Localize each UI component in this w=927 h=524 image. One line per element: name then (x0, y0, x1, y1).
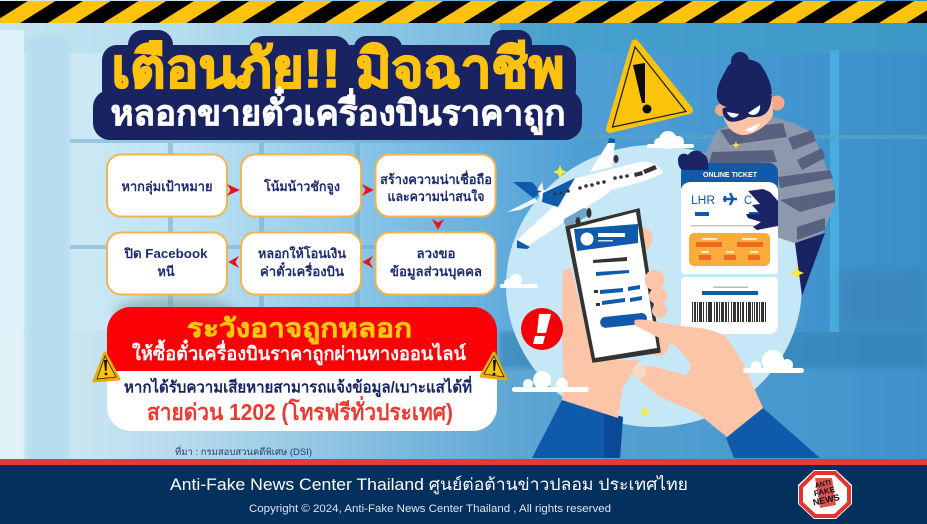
arrow 5 (229, 257, 238, 267)
arrow 4 (363, 257, 372, 267)
step 6 (107, 232, 227, 294)
warning heading: ระวังอาจถูกหลอก (187, 313, 412, 345)
logo: anti fake news: FAKE (813, 485, 836, 498)
step 1 (107, 154, 227, 216)
step 2 (241, 154, 361, 216)
thief gloves (678, 151, 778, 230)
palm right (633, 320, 763, 437)
hazard stripe band (0, 1, 927, 23)
icon: large warning triangle (610, 44, 689, 129)
ticket header (681, 163, 778, 190)
sparkles (553, 141, 804, 417)
ticket: ONLINE TICKET (703, 170, 757, 179)
warning subheading: ให้ซื้อตั๋วเครื่องบินราคาถูกผ่านทางออนไลน์ (132, 339, 466, 366)
arrow 2 (363, 185, 373, 195)
ticket (681, 163, 778, 334)
phone button (600, 313, 647, 328)
logo: anti fake news: NEWS (812, 492, 840, 508)
thief face (715, 90, 784, 135)
title line 1: เตือนภัย!! มิจฉาชีพ (112, 39, 564, 99)
thief striped sweater (705, 117, 835, 243)
backdrop circle (506, 145, 802, 427)
phone profile header (574, 224, 638, 251)
barcode (692, 302, 766, 322)
clouds (500, 131, 804, 392)
title navy backing (93, 30, 582, 140)
step 5: ค่าตั๋วเครื่องบิน (260, 261, 344, 279)
ticket stub (681, 277, 778, 334)
icon: small warning right (481, 353, 506, 379)
step 3 (376, 154, 496, 216)
route text: LHR (691, 195, 715, 207)
thief beanie (717, 52, 772, 107)
copyright: Copyright © 2024, Anti-Fake News Center Thailand , All rights reserved (249, 503, 611, 515)
sleeve right (726, 408, 820, 458)
step 5: หลอกให้โอนเงิน (258, 245, 346, 261)
step 3: สร้างความน่าเชื่อถือ (380, 170, 492, 187)
thief mask (723, 95, 772, 132)
footer title: Anti-Fake News Center Thailand ศูนย์ต่อต้านข่าวปลอม ประเทศไทย (170, 475, 688, 495)
icon: small warning left (94, 353, 119, 381)
step 2: โน้มน้าวชักจูง (263, 178, 340, 195)
hotline: สายด่วน 1202 (โทรฟรีทั่วประเทศ) (147, 395, 453, 425)
logo: anti fake news (798, 470, 852, 519)
sleeve left (532, 400, 623, 458)
step 5 (241, 232, 361, 294)
logo: anti fake news: ANTI (814, 480, 832, 490)
arrow 1 (228, 185, 239, 195)
step 1: หากลุ่มเป้าหมาย (122, 179, 212, 195)
step 6: ปิด Facebook (123, 246, 208, 261)
title line 2: หลอกขายตั๋วเครื่องบินราคาถูก (110, 86, 566, 135)
phone (566, 209, 660, 362)
right hand tapping (632, 320, 820, 458)
phone form rows (593, 257, 642, 306)
title block (93, 30, 582, 140)
thief legs (795, 233, 825, 296)
ticket: C (744, 195, 752, 207)
icon: red exclamation (521, 308, 563, 350)
step 4 (376, 232, 496, 294)
arrow 3 (433, 220, 443, 229)
step 6: หนี (158, 264, 175, 279)
step 4: ข้อมูลส่วนบุคคล (390, 264, 482, 280)
report instruction: หากได้รับความเสียหายสามารถแจ้งข้อมูล/เบาะแสได้ที่ (124, 376, 472, 398)
process flow (107, 154, 496, 294)
step 4: ลวงขอ (416, 246, 456, 261)
palm left (562, 268, 640, 418)
airplane (507, 138, 663, 249)
step 3: และความน่าสนใจ (388, 188, 484, 204)
ticket body (681, 182, 778, 274)
source credit: ที่มา : กรมสอบสวนคดีพิเศษ (DSI) (175, 445, 312, 458)
thief (705, 52, 835, 296)
left hand holding phone (532, 227, 669, 458)
illustration: scam scene (500, 44, 835, 458)
footer band (0, 465, 927, 524)
warning panel (94, 307, 506, 431)
red header and white body (107, 307, 497, 431)
left hand fingers (645, 270, 667, 318)
footer red rule (0, 459, 927, 465)
icon: ticket plane (723, 193, 737, 205)
footer (0, 459, 927, 524)
ticket orange seat panel (689, 233, 770, 266)
